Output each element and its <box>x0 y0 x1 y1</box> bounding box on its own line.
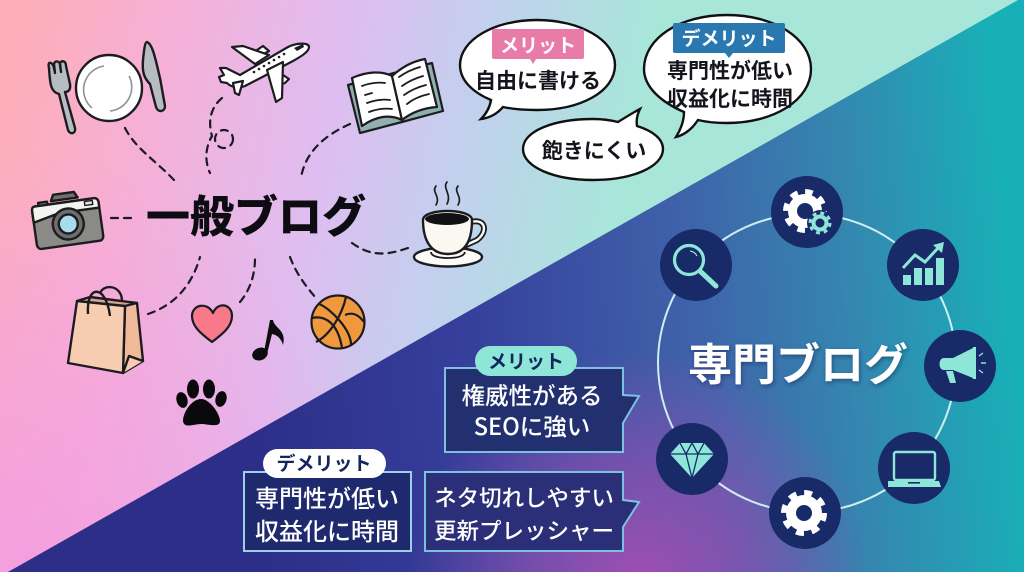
merit text: 自由に書ける <box>475 65 601 95</box>
icon: growth chart <box>887 229 959 301</box>
knife <box>143 42 165 111</box>
merit pill text: メリット <box>488 347 564 374</box>
merit label <box>492 29 584 64</box>
speech bubble: merit <box>460 20 615 119</box>
icon: coffee cup <box>414 182 484 266</box>
icon: megaphone <box>924 330 996 402</box>
icon: gear <box>769 477 841 549</box>
demerit text: 専門性が低い <box>667 55 793 85</box>
icon: diamond <box>656 423 728 495</box>
icon: laptop <box>878 432 950 504</box>
callout: specialist demerit detail <box>425 472 639 551</box>
icon: airplane <box>219 44 309 102</box>
ring connecting specialist icons <box>658 214 956 512</box>
steam <box>435 182 459 205</box>
icon: paw print <box>175 380 228 426</box>
callout: specialist demerit <box>244 449 411 551</box>
callout: specialist demerit detail: ネタ切れしやすい <box>434 481 614 513</box>
fork <box>49 61 75 133</box>
callout: specialist merit <box>445 346 639 452</box>
saucer <box>414 248 482 266</box>
demerit text: 収益化に時間 <box>255 512 399 547</box>
demerit text <box>255 479 399 547</box>
icon: open book <box>348 59 443 133</box>
icon: shopping bag <box>68 287 143 373</box>
plate <box>76 55 142 121</box>
speech bubble: hard to get bored <box>523 109 663 180</box>
handle <box>464 221 484 246</box>
icon: basketball <box>312 296 364 348</box>
icon: fork plate knife <box>49 42 165 133</box>
demerit pill <box>263 449 386 478</box>
merit text: 権威性がある <box>462 377 602 411</box>
callout: specialist demerit detail: 更新プレッシャー <box>434 514 614 546</box>
speech bubble: demerit <box>644 15 811 137</box>
merit text <box>462 377 602 442</box>
icon: heart <box>192 305 232 342</box>
demerit text: 専門性が低い <box>255 479 399 514</box>
title: general blog: 一般ブログ <box>146 181 366 245</box>
demerit label text: デメリット <box>681 24 777 51</box>
demerit pill text: デメリット <box>276 449 372 476</box>
demerit text <box>667 55 793 113</box>
icon: camera <box>30 189 104 250</box>
icon: magnifier <box>660 229 732 301</box>
icon: gears <box>771 176 843 248</box>
speech bubble: hard to get bored: 飽きにくい <box>542 135 646 165</box>
cup <box>423 211 472 254</box>
demerit text: 収益化に時間 <box>667 83 793 113</box>
merit pill <box>475 346 577 376</box>
demerit label <box>673 23 785 58</box>
title: specialist blog: 専門ブログ <box>688 329 908 393</box>
dashed connector lines <box>111 98 408 314</box>
icon: music note <box>250 320 284 363</box>
merit text: SEOに強い <box>474 408 590 442</box>
merit label text: メリット <box>500 31 576 58</box>
